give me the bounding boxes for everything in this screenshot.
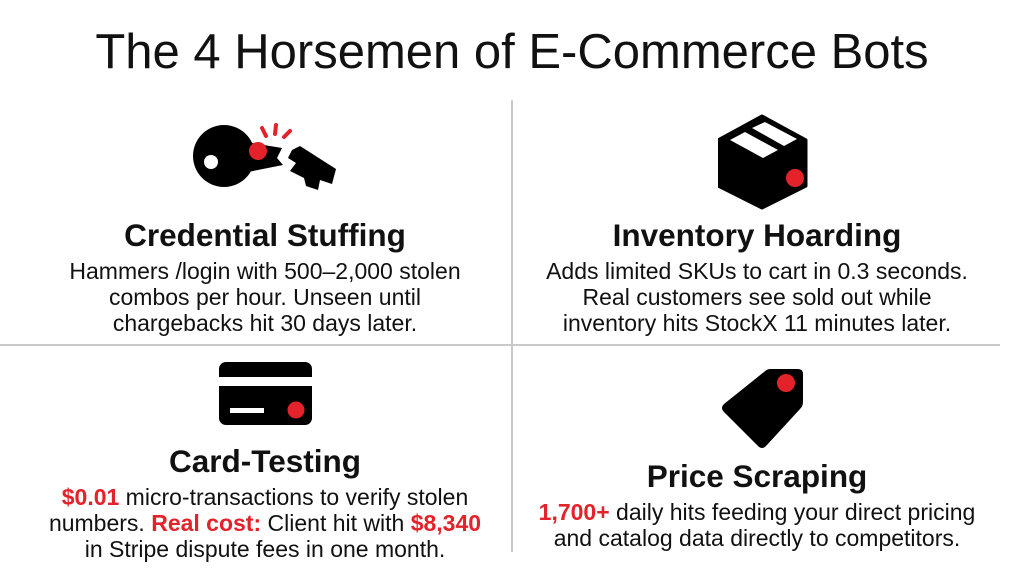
icon: credit card [219,362,312,425]
body text [539,499,975,551]
panel: credential stuffing [69,123,461,336]
body text: chargebacks hit 30 days later. [113,310,417,336]
body text: Adds limited SKUs to cart in 0.3 seconds. [546,258,968,284]
body text [49,484,481,562]
panel: inventory hoarding [546,114,968,336]
icon: box [718,114,808,210]
title: The 4 Horsemen of E-Commerce Bots [95,25,929,79]
panel: price scraping [539,369,975,551]
body text: inventory hits StockX 11 minutes later. [563,310,951,336]
heading: Inventory Hoarding [613,217,901,253]
panel: card-testing [49,362,481,562]
body text: numbers. Real cost: Client hit with $8,340 [49,510,481,536]
heading: Credential Stuffing [124,217,406,253]
body text: 1,700+ daily hits feeding your direct pricing [539,499,975,525]
body text: Real customers see sold out while [582,284,932,310]
body text: $0.01 micro-transactions to verify stolen [62,484,468,510]
body text [69,258,461,336]
icon: price tag [722,369,803,448]
body text: Hammers /login with 500–2,000 stolen [69,258,461,284]
body text [546,258,968,336]
icon: broken key [193,123,336,190]
body text: combos per hour. Unseen until [109,284,421,310]
heading: Card-Testing [169,443,361,479]
body text: and catalog data directly to competitors. [554,525,960,551]
heading: Price Scraping [647,458,867,494]
body text: in Stripe dispute fees in one month. [85,536,445,562]
